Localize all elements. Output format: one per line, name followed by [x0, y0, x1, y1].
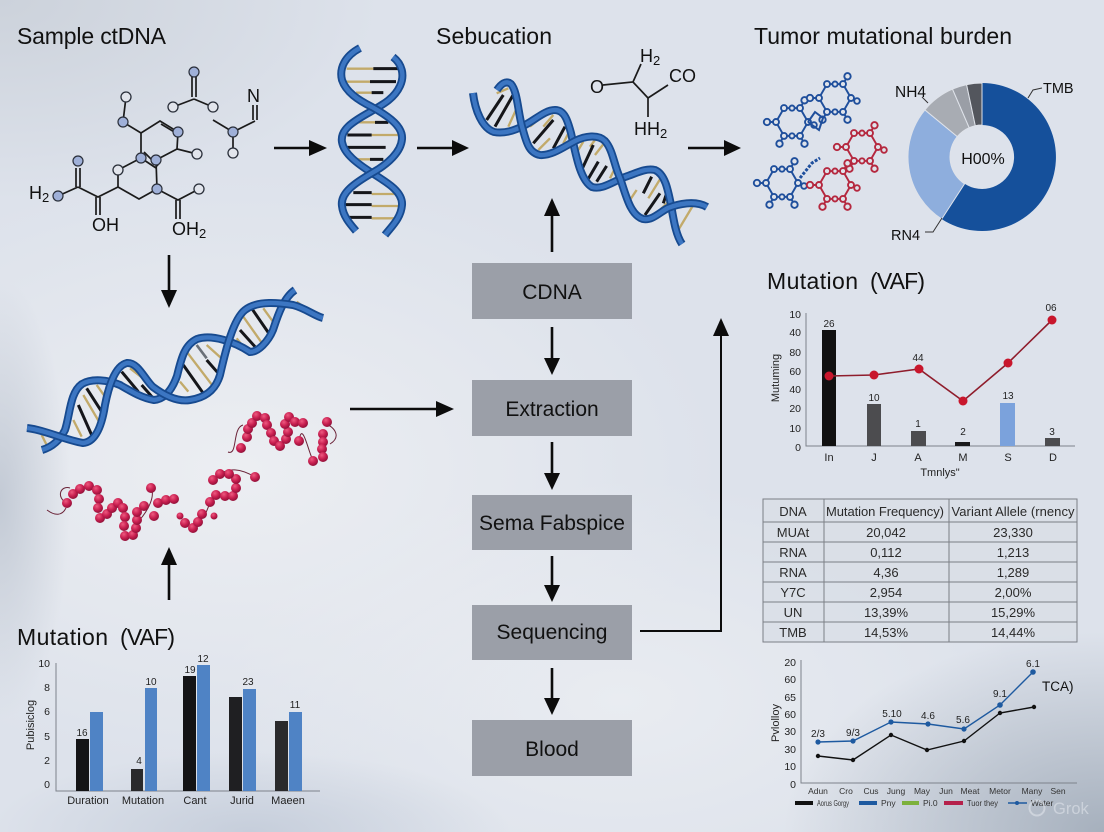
value labels	[811, 659, 1040, 740]
y axis ticks: 0	[795, 442, 801, 454]
step: Blood: Blood	[525, 738, 579, 761]
title: Tumor mutational burden: Tumor mutational burden	[754, 23, 1012, 49]
step: Sema Fabspice: Sema Fabspice	[479, 512, 625, 535]
table rows: 0,112	[870, 545, 902, 560]
x axis labels: Metor	[989, 786, 1011, 796]
x axis labels: D	[1049, 452, 1057, 464]
y axis ticks: 10	[789, 309, 801, 321]
black bars	[76, 676, 288, 791]
x axis labels: S	[1004, 452, 1012, 464]
series label: TCA)	[1042, 679, 1074, 694]
value labels	[76, 654, 301, 767]
step: Sequencing: Sequencing	[497, 621, 607, 644]
arrow: molecule to helix	[274, 140, 327, 156]
table rows: UN	[784, 605, 802, 620]
value labels: 44	[912, 353, 924, 364]
value labels: 9/3	[846, 728, 860, 739]
arrow: up to proteins	[161, 547, 177, 600]
x axis labels: J	[871, 452, 877, 464]
icon: sample molecule: OH	[172, 219, 199, 239]
table rows	[777, 525, 1035, 640]
x axis labels: Meat	[961, 786, 980, 796]
legend: Pi.0	[923, 798, 938, 808]
step: CDNA	[472, 263, 632, 319]
y axis ticks: 20	[784, 657, 796, 669]
x axis labels: M	[958, 452, 968, 464]
y axis ticks	[38, 658, 50, 791]
x axis labels: Sen	[1050, 786, 1066, 796]
heading: Mutation VAF left	[17, 624, 175, 650]
value labels	[823, 303, 1057, 438]
y axis label: Mutuming	[770, 354, 782, 402]
table rows: 1,289	[997, 565, 1029, 580]
black series	[816, 705, 1036, 762]
legend: Water	[1031, 798, 1054, 808]
segment: grey small	[952, 85, 975, 128]
value labels: 23	[242, 677, 254, 688]
table rows: Y7C	[780, 585, 806, 600]
value labels: 9.1	[993, 689, 1007, 700]
data table	[763, 499, 1077, 642]
y axis ticks: 60	[784, 674, 796, 686]
step: Blood	[472, 720, 632, 776]
arrow: Sequencing to Blood	[544, 668, 560, 715]
table rows: 14,53%	[864, 625, 908, 640]
table rows: MUAt	[777, 525, 810, 540]
step: Sequencing	[472, 605, 632, 660]
x axis labels: May	[914, 786, 931, 796]
donut centre label: H00%	[961, 151, 1005, 168]
arrow: Extraction to Sema Fabspice	[544, 442, 560, 490]
table rows: 1,213	[997, 545, 1029, 560]
icon: sample molecule: 2	[199, 226, 206, 241]
x axis labels	[808, 786, 1066, 796]
value labels: 11	[290, 700, 301, 711]
watermark: Grok	[1030, 800, 1090, 818]
y axis ticks: 80	[789, 347, 801, 359]
icon: protein chain lower	[47, 469, 260, 541]
value labels: 2	[960, 427, 966, 438]
legend: Aorus Gorgy	[817, 798, 849, 808]
x axis labels: Jurid	[230, 795, 254, 807]
y axis ticks: 5	[44, 731, 50, 743]
value labels: 26	[823, 319, 835, 330]
icon: sample molecule: 2	[42, 190, 49, 205]
icon: small molecule: CO	[669, 66, 696, 86]
arrow: helix to extraction	[350, 401, 454, 417]
y axis ticks: 10	[789, 423, 801, 435]
y axis ticks: 30	[784, 726, 796, 738]
label: TMB	[1028, 81, 1074, 98]
step: Extraction	[472, 380, 632, 436]
arrow: cdna up to helix	[544, 198, 560, 252]
y axis ticks: 60	[784, 709, 796, 721]
value labels: 5.6	[956, 715, 970, 726]
value labels: 5.10	[882, 709, 902, 720]
table header	[779, 504, 1075, 519]
icon: small molecule: O	[590, 77, 604, 97]
x axis labels: In	[824, 452, 834, 464]
icon: small molecule: H	[640, 46, 653, 66]
table rows: RNA	[779, 545, 807, 560]
table header: Variant Allele (rnency	[952, 504, 1075, 519]
step: CDNA: CDNA	[522, 281, 582, 304]
y axis ticks: 10	[38, 658, 50, 670]
y axis ticks: 40	[789, 327, 801, 339]
blue series	[815, 669, 1036, 745]
table rows: 2,00%	[995, 585, 1032, 600]
x axis labels: Cant	[183, 795, 207, 807]
x axis labels	[67, 795, 305, 807]
y axis ticks	[784, 657, 796, 791]
y axis ticks: 0	[790, 779, 796, 791]
arrow: Sema Fabspice to Sequencing	[544, 556, 560, 602]
watermark: Grok: Grok	[1053, 800, 1090, 818]
icon: small molecule: 2	[660, 126, 667, 141]
x axis labels: Cro	[839, 786, 853, 796]
table rows: RNA	[779, 565, 807, 580]
table rows: 23,330	[993, 525, 1033, 540]
heading: Mutation VAF right	[767, 268, 925, 294]
x axis labels: Mutation	[122, 795, 164, 807]
x axis labels: Duration	[67, 795, 109, 807]
table rows: TMB	[779, 625, 807, 640]
table rows: 4,36	[873, 565, 899, 580]
legend	[795, 798, 1054, 808]
icon: molecular network	[754, 73, 887, 210]
bars	[822, 330, 1060, 446]
value labels: 06	[1045, 303, 1057, 314]
icon: vertical DNA helix	[341, 48, 402, 235]
y axis ticks	[789, 309, 801, 454]
arrow: helix to sequence	[417, 140, 469, 156]
x axis labels: Maeen	[271, 795, 305, 807]
value labels: 6.1	[1026, 659, 1040, 670]
x axis labels: Jun	[939, 786, 953, 796]
icon: small molecule: HH	[634, 119, 660, 139]
step: Extraction: Extraction	[505, 398, 599, 421]
icon: long DNA helix	[27, 290, 323, 450]
y axis label: Pvlolloy	[770, 704, 782, 742]
arrow: Sequencing to results	[640, 318, 729, 631]
label: RN4: RN4	[891, 228, 920, 244]
table rows: 13,39%	[864, 605, 908, 620]
line series	[824, 316, 1056, 406]
label: TMB: TMB	[1043, 81, 1074, 97]
value labels: 10	[868, 393, 880, 404]
segment: TMB	[942, 83, 1056, 231]
icon: sample molecule: N	[247, 86, 260, 106]
segment: dark grey	[967, 83, 982, 126]
arrow: sequence to burden	[688, 140, 741, 156]
value labels: 4.6	[921, 711, 935, 722]
y axis ticks: 30	[784, 744, 796, 756]
heading: Mutation VAF left: (VAF)	[120, 624, 175, 650]
value labels: 10	[145, 677, 157, 688]
icon: small molecule: 2	[653, 53, 660, 68]
value labels: 16	[76, 728, 88, 739]
heading: Mutation VAF right: (VAF)	[870, 268, 925, 294]
table rows: 14,44%	[991, 625, 1035, 640]
y axis ticks: 60	[789, 366, 801, 378]
chart: line chart, bottom right	[770, 657, 1077, 808]
y axis ticks: 6	[44, 706, 50, 718]
table header: DNA	[779, 504, 807, 519]
y axis label: Pubisiclog	[25, 700, 37, 750]
table rows: 20,042	[866, 525, 906, 540]
legend: Pny	[881, 798, 896, 808]
table rows: 2,954	[870, 585, 902, 600]
title: Sample ctDNA: Sample ctDNA	[17, 23, 167, 49]
y axis ticks: 2	[44, 755, 50, 767]
chart: grouped bars, bottom left	[25, 654, 320, 807]
y axis ticks: 10	[784, 761, 796, 773]
segment: NH4	[925, 89, 969, 137]
icon: sample molecule: H	[29, 183, 42, 203]
icon: diagonal DNA helix	[473, 82, 707, 244]
segment: RN4	[908, 110, 965, 219]
heading: Mutation VAF left: Mutation	[17, 624, 108, 650]
value labels: 4	[136, 756, 142, 767]
table rows: 15,29%	[991, 605, 1035, 620]
value labels: 13	[1002, 391, 1014, 402]
value labels: 1	[915, 419, 921, 430]
arrow: CDNA to Extraction	[544, 327, 560, 375]
chart: bars and line, right	[770, 303, 1075, 479]
value labels: 2/3	[811, 729, 825, 740]
y axis ticks: 65	[784, 692, 796, 704]
table header: Mutation Frequency)	[826, 504, 944, 519]
icon: protein chain upper	[228, 411, 336, 466]
value labels: 12	[197, 654, 209, 665]
y axis ticks: 40	[789, 384, 801, 396]
step: Sema Fabspice	[472, 495, 632, 550]
arrow: molecule down to helix	[161, 255, 177, 308]
y axis ticks: 0	[44, 779, 50, 791]
x axis labels: Jung	[887, 786, 905, 796]
x axis labels	[824, 452, 1057, 464]
label: NH4: NH4	[895, 84, 926, 101]
value labels: 19	[184, 665, 196, 676]
legend: Tuor they	[967, 798, 999, 808]
y axis ticks: 20	[789, 403, 801, 415]
label: RN4	[891, 218, 942, 244]
y axis ticks: 8	[44, 682, 50, 694]
title: Sebucation: Sebucation	[436, 23, 552, 49]
heading: Mutation VAF right: Mutation	[767, 268, 858, 294]
value labels: 3	[1049, 427, 1055, 438]
icon: sample molecule	[29, 67, 260, 241]
blue bars	[90, 665, 302, 791]
icon: sample molecule: OH	[92, 215, 119, 235]
donut chart	[891, 81, 1074, 244]
icon: small molecule	[590, 46, 696, 141]
x axis labels: Many	[1022, 786, 1043, 796]
x axis labels: A	[914, 452, 922, 464]
x axis title: Tmnlys"	[920, 467, 960, 479]
x axis labels: Adun	[808, 786, 828, 796]
x axis labels: Cus	[863, 786, 879, 796]
